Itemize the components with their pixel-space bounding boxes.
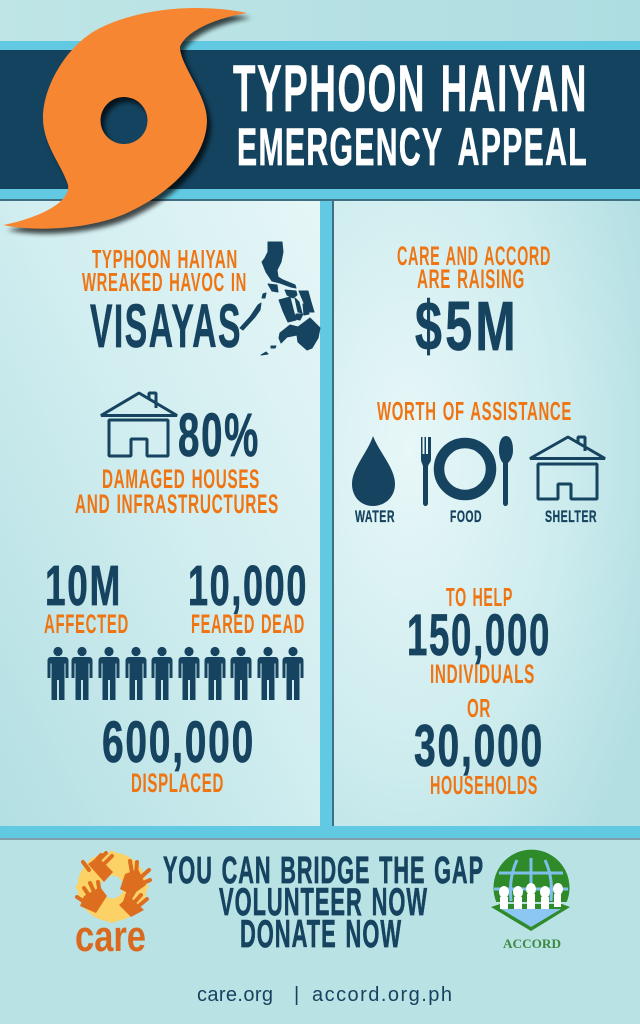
footer call to action	[163, 850, 484, 956]
figure: $5M: $5M	[415, 287, 519, 365]
stat: 10,000 feared dead: FEARED DEAD	[191, 609, 305, 639]
stat: 600,000 displaced	[102, 710, 255, 798]
logo: care	[75, 853, 150, 961]
footer call to action: DONATE NOW	[240, 913, 402, 956]
icon: ring of hands	[77, 853, 150, 921]
vertical divider	[320, 199, 334, 827]
text: to help: TO HELP	[446, 582, 513, 612]
text: damaged houses and infrastructures	[75, 464, 279, 519]
footer call to action: VOLUNTEER NOW	[219, 881, 428, 924]
stat: 10M affected: 10M	[45, 554, 122, 618]
icon: water drop	[352, 436, 395, 506]
label: food: FOOD	[450, 507, 482, 526]
text: or: OR	[467, 693, 491, 723]
figure: 150,000: 150,000	[407, 603, 551, 668]
label: water: WATER	[355, 507, 395, 526]
text: care and accord are raising	[397, 241, 551, 294]
icon: row of people	[48, 647, 304, 700]
logo: accord	[491, 851, 570, 951]
wordmark: accord: ACCORD	[503, 936, 561, 951]
icon: globe	[491, 851, 570, 931]
wordmark: care: care	[75, 912, 146, 961]
panel: right	[332, 199, 640, 826]
horizontal divider above footer	[0, 826, 640, 840]
stat: 10,000 feared dead	[188, 554, 308, 639]
stat: 10,000 feared dead: 10,000	[188, 554, 308, 618]
text: households: HOUSEHOLDS	[430, 770, 538, 800]
title	[233, 51, 588, 177]
icon: fork plate spoon	[421, 436, 513, 506]
text: typhoon haiyan wreaked havoc in: TYPHOON HAIYAN	[92, 244, 238, 274]
figure: 80%: 80%	[178, 401, 260, 469]
stat: 600,000 displaced: 600,000	[102, 710, 255, 775]
icon: typhoon symbol	[3, 8, 251, 234]
stat: 10M affected: AFFECTED	[44, 609, 129, 639]
icon: house	[101, 393, 177, 456]
text: damaged houses and infrastructures: AND INFRASTRUCTURES	[75, 489, 279, 519]
icon: house with 80 percent	[101, 393, 260, 469]
panel: left	[0, 199, 320, 826]
panel: footer background	[0, 838, 640, 1024]
icon: water	[352, 436, 395, 526]
icon: shelter	[530, 437, 605, 526]
text: individuals: INDIVIDUALS	[430, 659, 535, 689]
website links: |	[294, 984, 299, 1006]
text: care and accord are raising: ARE RAISING	[417, 264, 525, 294]
label: shelter: SHELTER	[545, 507, 597, 526]
icon: house	[530, 437, 605, 499]
text: visayas: VISAYAS	[90, 292, 242, 360]
stat: 600,000 displaced: DISPLACED	[131, 768, 224, 798]
text: damaged houses and infrastructures: DAMAGED HOUSES	[102, 464, 260, 494]
figure: 30,000: 30,000	[414, 713, 544, 779]
icon: philippines map	[240, 242, 320, 355]
stat: 10M affected	[44, 554, 129, 639]
icon: food	[421, 436, 513, 526]
text: typhoon haiyan wreaked havoc in	[82, 244, 247, 297]
website links: care.org	[197, 984, 273, 1006]
text: typhoon haiyan wreaked havoc in: WREAKED HAVOC IN	[82, 267, 247, 297]
website links	[197, 984, 452, 1006]
header banner	[0, 41, 640, 201]
website links: accord.org.ph	[312, 984, 452, 1006]
